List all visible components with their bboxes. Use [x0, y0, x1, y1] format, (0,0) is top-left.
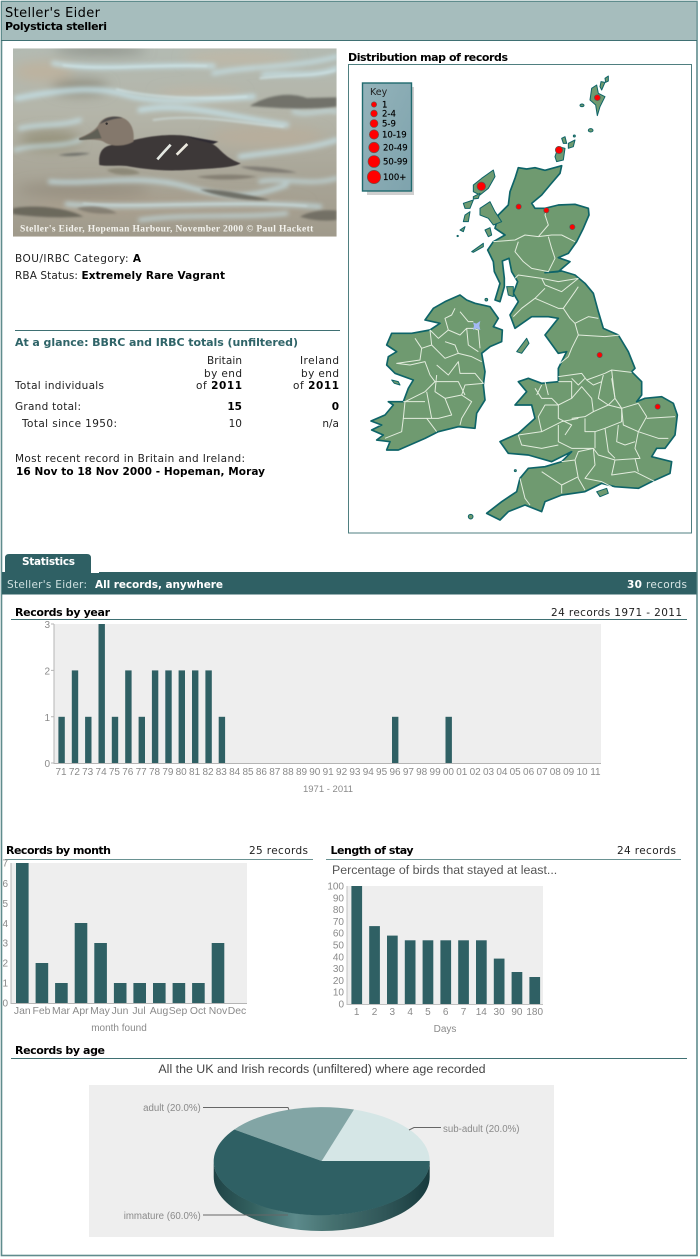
map: county boundaries: [385, 210, 675, 505]
label: immature: immature (60.0%): [124, 1211, 201, 1222]
bar chart: length of stay: 70: [333, 917, 344, 928]
bar chart: length of stay: 0: [338, 1000, 344, 1010]
bar chart: records by year: 83: [216, 767, 227, 778]
bar chart: records by year: 09: [563, 767, 575, 778]
bar chart: length of stay: 10: [333, 988, 344, 999]
category and status: [15, 253, 225, 282]
map key: Key: [370, 87, 388, 98]
bar chart: records by year: 98: [416, 767, 428, 778]
bar chart: records by year: 05: [510, 767, 521, 778]
bar chart: records by year: 77: [136, 767, 147, 778]
bar chart: records by year: 01: [456, 767, 468, 778]
light blue sheen: [15, 57, 337, 220]
bar chart: records by year: 07: [536, 767, 548, 778]
pie chart: records by age: [89, 1062, 554, 1237]
distribution map: [348, 64, 692, 533]
map: record dots: [477, 95, 660, 409]
bar chart: records by year: 75: [109, 767, 120, 778]
bar chart: records by year: 96: [389, 767, 401, 778]
pie chart: records by age: All the UK and Irish records (unfiltered) where age recorded: [158, 1062, 486, 1076]
bar chart: length of stay: Days: [434, 1024, 456, 1035]
bar chart: records by year: 03: [483, 767, 494, 778]
bar chart: records by year: 1971 - 2011: [303, 784, 353, 795]
bar chart: records by year: 81: [189, 767, 201, 778]
bar chart: records by year: 95: [376, 767, 388, 778]
bar chart: length of stay: 50: [333, 940, 344, 952]
slice: immature: [214, 1130, 430, 1215]
bar chart: records by year: 72: [69, 767, 80, 778]
bar chart: records by year: 06: [523, 767, 535, 778]
bar chart: records by month: Mar: [52, 1006, 70, 1017]
map key: 50-99: [383, 158, 408, 168]
bar chart: length of stay: 1: [354, 1007, 360, 1018]
label: adult: adult (20.0%): [143, 1103, 201, 1114]
heading: length of stay: 24 records: [617, 845, 676, 857]
bar chart: length of stay: 40: [333, 952, 344, 963]
most recent record: Most recent record in Britain and Ireland:: [15, 453, 245, 465]
bar chart: length of stay: 30: [494, 1007, 505, 1018]
bar chart: records by year: 85: [242, 767, 254, 778]
bar chart: length of stay: 2: [372, 1007, 378, 1018]
category and status: BOU/IRBC Category: A: [15, 253, 142, 265]
bar chart: records by month: 7: [2, 858, 8, 870]
header: species name: Steller's Eider: [5, 6, 101, 21]
statistics tab: [5, 554, 91, 572]
heading: records by year: 24 records 1971 - 2011: [551, 607, 682, 619]
bar chart: length of stay: 4: [407, 1007, 413, 1018]
bar chart: records by month: 2: [2, 958, 8, 970]
map key: [362, 83, 414, 195]
bar chart: records by year: 0: [44, 759, 50, 770]
category and status: RBA Status: Extremely Rare Vagrant: [15, 270, 225, 282]
bar chart: length of stay: 3: [390, 1007, 396, 1018]
bar chart: records by year: 93: [349, 767, 361, 778]
bar chart: records by year: [44, 620, 601, 795]
heading: length of stay: [326, 844, 681, 860]
bar chart: length of stay: [327, 863, 557, 1035]
bar chart: length of stay: 6: [443, 1007, 449, 1018]
bar chart: records by year: 76: [122, 767, 134, 778]
at a glance table: Total individuals: [14, 380, 104, 392]
map key: 5-9: [382, 120, 396, 130]
heading: records by month: 25 records: [249, 845, 308, 857]
at a glance table: by end: [301, 368, 339, 380]
bar chart: length of stay: 14: [476, 1007, 487, 1018]
at a glance table: 15: [227, 401, 242, 413]
bar chart: length of stay: 90: [511, 1007, 523, 1018]
header: species name: Polysticta stelleri: [5, 20, 107, 33]
slice: sub-adult: [322, 1110, 430, 1161]
bar chart: length of stay: 180: [526, 1007, 543, 1018]
bar chart: records by year: 78: [149, 767, 160, 778]
bar chart: records by year: 11: [590, 767, 601, 778]
bar chart: records by year: 87: [269, 767, 281, 778]
label: sub-adult: sub-adult (20.0%): [443, 1124, 519, 1135]
bar chart: records by year: 88: [283, 767, 294, 778]
map: Great Britain: [487, 166, 677, 520]
bar chart: records by month: May: [90, 1006, 111, 1017]
at a glance table: of 2011: [293, 380, 339, 392]
distribution map heading: Distribution map of records: [348, 51, 508, 64]
bar chart: length of stay: Percentage of birds that stayed at least...: [332, 863, 557, 877]
bar chart: records by month: Nov: [209, 1006, 228, 1017]
at a glance table: Total since 1950:: [21, 418, 117, 430]
most recent record: 16 Nov to 18 Nov 2000 - Hopeman, Moray: [16, 466, 265, 478]
map: islands: [392, 76, 608, 519]
bar chart: records by year: 84: [229, 767, 241, 778]
map key: 100+: [383, 173, 406, 183]
bar chart: records by year: 00: [443, 767, 454, 778]
bar chart: records by month: [2, 858, 247, 1034]
at a glance table: by end: [204, 368, 242, 380]
at a glance table: Britain: [207, 355, 242, 367]
bar chart: records by month: 5: [2, 899, 8, 910]
map: Ireland: [371, 295, 502, 450]
dark swells: [13, 95, 337, 221]
bar chart: records by year: 90: [309, 767, 321, 778]
statistics bar: [2, 572, 696, 594]
most recent record: [15, 453, 265, 478]
bar chart: records by year: 73: [82, 767, 94, 778]
bar chart: records by year: 79: [162, 767, 174, 778]
bar chart: records by month: 6: [2, 879, 8, 890]
at a glance table: 10: [229, 418, 242, 430]
map key: 10-19: [382, 130, 407, 140]
bar chart: records by year: 89: [296, 767, 307, 778]
bar chart: records by month: Oct: [190, 1006, 206, 1017]
bar chart: records by year: 91: [323, 767, 334, 778]
bar chart: records by year: 1: [44, 713, 50, 724]
bar chart: length of stay: 7: [461, 1007, 467, 1018]
at a glance table: n/a: [322, 418, 339, 430]
bar chart: records by month: 1: [2, 978, 8, 990]
heading: length of stay: Length of stay: [330, 844, 414, 857]
bar chart: records by year: 02: [470, 767, 481, 778]
pie side: [214, 1161, 430, 1231]
bar chart: length of stay: 80: [333, 905, 344, 916]
bar chart: records by year: 04: [496, 767, 508, 778]
bar chart: records by month: Jun: [112, 1006, 129, 1017]
bar chart: records by month: Aug: [150, 1006, 168, 1017]
bar chart: records by month: month found: [91, 1023, 147, 1034]
bar chart: records by month: 3: [2, 938, 8, 950]
heading: records by year: [11, 606, 687, 620]
statistics bar: 30 records: [627, 579, 687, 591]
bar chart: records by year: 08: [550, 767, 561, 778]
bar chart: records by year: 99: [430, 767, 441, 778]
statistics bar: All records, anywhere: [95, 579, 223, 591]
map key: 2-4: [382, 110, 396, 120]
at a glance table: [14, 330, 340, 430]
bar chart: records by year: 97: [403, 767, 414, 778]
bar chart: length of stay: 60: [333, 929, 344, 940]
dark and warm water patches: [18, 48, 270, 200]
heading: records by month: [5, 844, 313, 860]
heading: records by age: Records by age: [15, 1044, 105, 1057]
bar chart: records by month: Sep: [169, 1006, 187, 1017]
bar chart: length of stay: 90: [333, 893, 344, 904]
bar chart: records by month: 0: [2, 998, 8, 1010]
bar chart: length of stay: 30: [333, 964, 344, 975]
bar chart: records by month: Jul: [132, 1006, 146, 1017]
bar chart: records by month: Dec: [228, 1006, 246, 1017]
bird body: [79, 116, 241, 170]
bar chart: records by year: 94: [363, 767, 374, 778]
slice: adult: [234, 1107, 354, 1161]
photo: Steller's Eider on water: [13, 47, 337, 237]
bar chart: records by year: 92: [336, 767, 348, 778]
bar chart: records by month: Feb: [33, 1006, 51, 1017]
bar chart: records by month: Jan: [14, 1006, 31, 1017]
header: species name: [1, 2, 697, 41]
bar chart: records by month: Apr: [72, 1006, 89, 1017]
at a glance table: 0: [332, 401, 339, 413]
map key: 1: [382, 100, 387, 110]
bar chart: records by year: 80: [176, 767, 187, 778]
bar chart: length of stay: 100: [327, 882, 344, 892]
photo caption: Steller's Eider, Hopeman Harbour, November 2000 © Paul Hackett: [20, 224, 314, 235]
statistics tab: Statistics: [22, 556, 75, 568]
statistics bar: Steller's Eider:: [7, 579, 87, 591]
bar chart: records by month: 4: [2, 919, 8, 930]
bar chart: records by year: 86: [256, 767, 267, 778]
bar chart: records by year: 71: [55, 767, 67, 778]
bar chart: records by year: 10: [576, 767, 588, 778]
bar chart: length of stay: 20: [333, 976, 344, 987]
label: sub-adult: [409, 1124, 519, 1135]
at a glance table: Grand total:: [15, 401, 81, 413]
at a glance table: of 2011: [196, 380, 242, 392]
heading: records by year: Records by year: [15, 606, 111, 619]
bar chart: length of stay: 5: [425, 1007, 431, 1018]
bar chart: records by year: 82: [202, 767, 214, 778]
map: lough marker: [473, 321, 480, 330]
bar chart: records by year: 3: [44, 620, 50, 631]
at a glance table: At a glance: BBRC and IRBC totals (unfiltered): [15, 336, 298, 349]
bar chart: records by year: 2: [44, 666, 50, 678]
at a glance table: Ireland: [300, 355, 339, 367]
bar chart: records by year: 74: [96, 767, 107, 778]
heading: records by month: Records by month: [6, 844, 111, 857]
map key: 20-49: [383, 144, 408, 154]
